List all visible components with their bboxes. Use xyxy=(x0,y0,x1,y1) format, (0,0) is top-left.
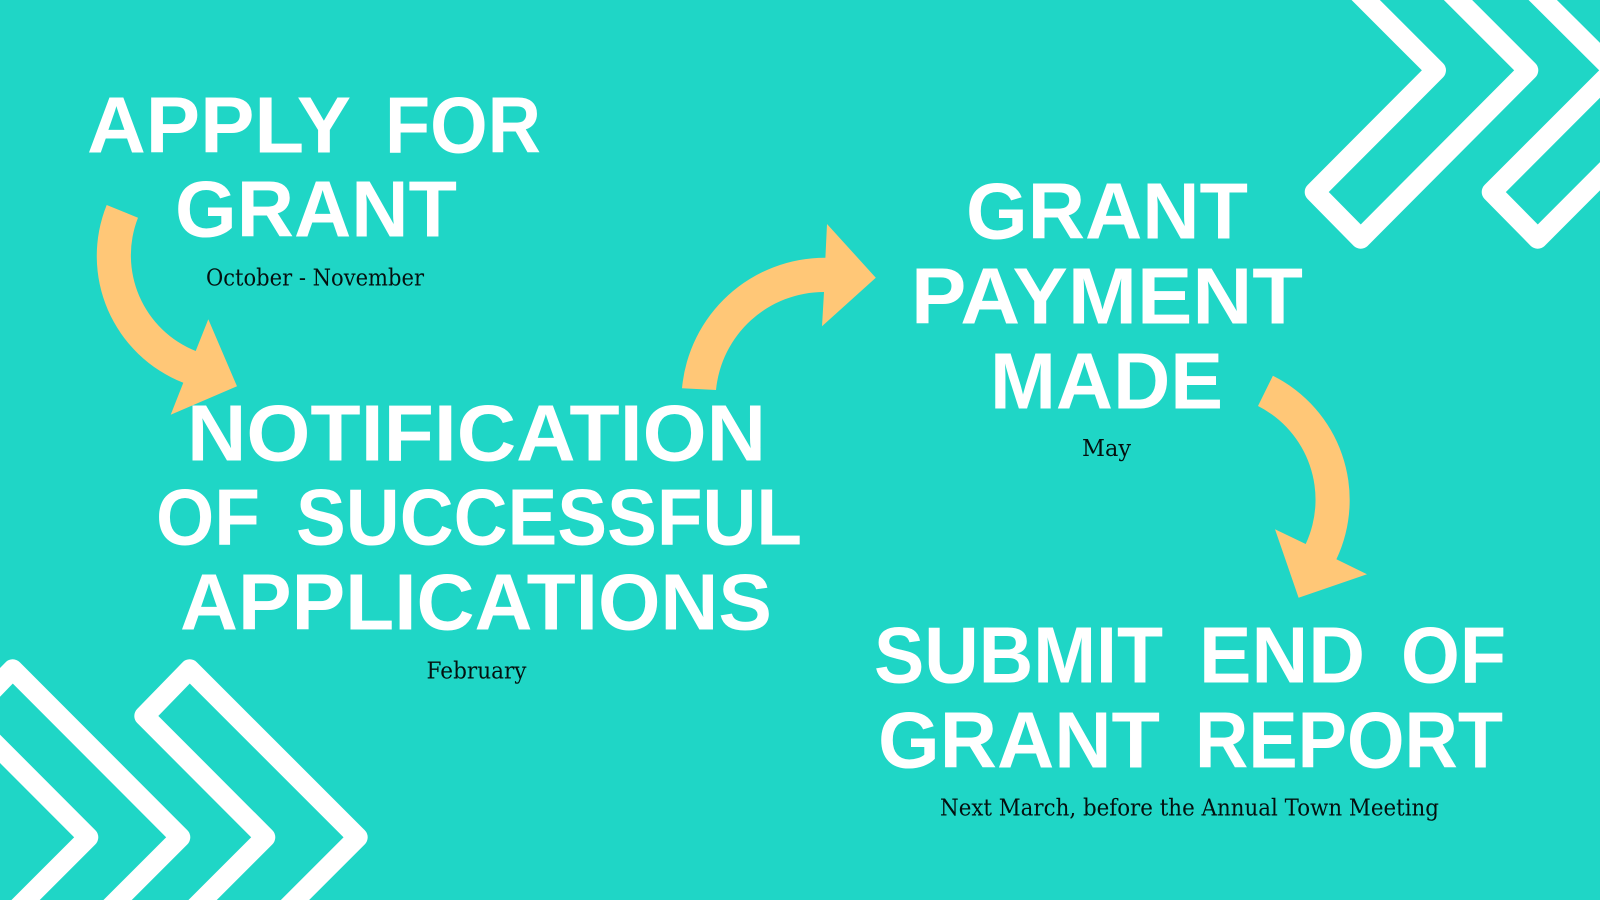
step: apply for grant xyxy=(87,80,541,292)
heading: submit end of grant report xyxy=(874,610,1506,784)
step: submit end of grant report xyxy=(874,610,1506,822)
heading: grant payment made: PAYMENT xyxy=(911,252,1303,340)
heading: grant payment made: GRANT xyxy=(966,166,1248,256)
heading: apply for grant: APPLY xyxy=(87,80,351,170)
heading: apply for grant xyxy=(87,80,541,254)
icon: bottom-left chevrons xyxy=(0,669,358,900)
step: notification of successful applications xyxy=(156,388,802,684)
heading: apply for grant: GRANT xyxy=(175,164,457,254)
step: grant payment made xyxy=(911,166,1303,462)
heading: submit end of grant report: SUBMIT xyxy=(874,610,1163,700)
arrow: apply to notification xyxy=(97,205,237,415)
arrow: notification to payment xyxy=(682,224,876,390)
heading: apply for grant: FOR xyxy=(385,80,541,170)
arrow: payment to report xyxy=(1258,376,1367,598)
heading: notification of successful applications xyxy=(156,388,802,646)
date: february: February xyxy=(426,658,527,684)
heading: submit end of grant report: END xyxy=(1199,610,1365,700)
heading: submit end of grant report: GRANT xyxy=(878,696,1160,784)
heading: notification of successful applications: SUCCESSFUL xyxy=(296,472,802,562)
heading: submit end of grant report: OF xyxy=(1401,610,1506,700)
date: october to november: October - November xyxy=(206,266,424,292)
icon: top-right chevrons xyxy=(1315,0,1600,239)
date: next march: Next March, before the Annual Town Meeting xyxy=(940,796,1439,822)
heading: grant payment made xyxy=(911,166,1303,426)
heading: notification of successful applications: OF xyxy=(156,472,260,562)
heading: notification of successful applications: APPLICATIONS xyxy=(180,558,772,646)
heading: grant payment made: MADE xyxy=(990,336,1223,426)
heading: notification of successful applications: NOTIFICATION xyxy=(187,388,766,478)
heading: submit end of grant report: REPORT xyxy=(1195,696,1503,784)
date: may: May xyxy=(1082,436,1131,462)
